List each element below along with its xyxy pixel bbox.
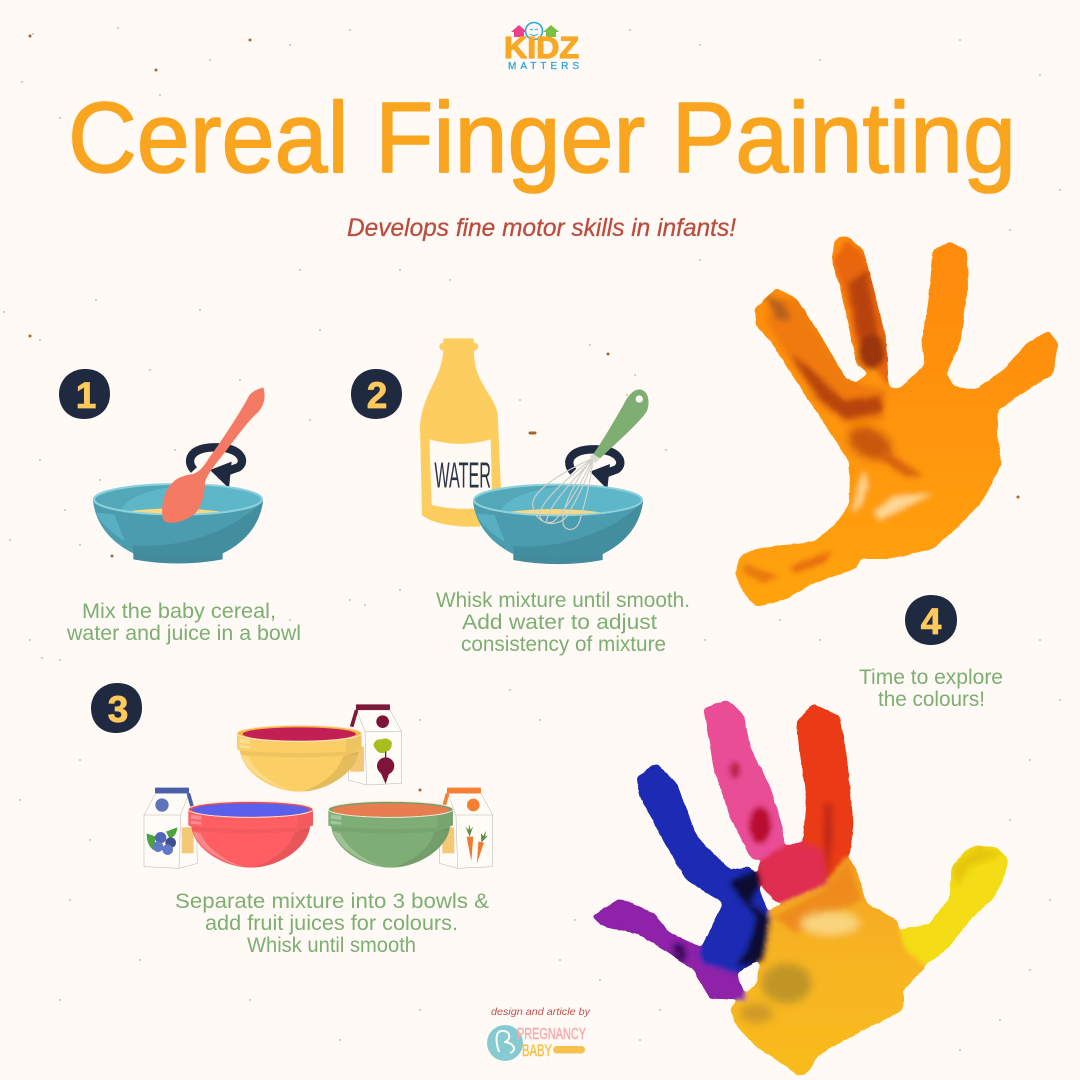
red-pink knuckle [758, 842, 827, 903]
step 1 badge: 1 [76, 375, 96, 416]
green bowl with carrot juice [328, 801, 453, 868]
wordmark BABY: BABY [522, 1041, 552, 1060]
bowl [93, 484, 263, 563]
step 1 text: water and juice in a bowl [66, 622, 301, 645]
step 4 badge [905, 595, 957, 645]
pink finger [703, 700, 783, 860]
yellow bowl with beetroot juice [237, 725, 362, 792]
step 1 text: Mix the baby cereal, [82, 600, 276, 623]
step 4 text: Time to explore [859, 666, 1003, 689]
badge pill [553, 1046, 585, 1054]
credit text: design and article by [491, 1006, 591, 1018]
palm shading [773, 860, 862, 933]
step 1 badge [59, 369, 110, 419]
step 3 badge: 3 [108, 689, 128, 730]
logo: Kidz Matters [504, 22, 579, 72]
red finger [797, 703, 853, 877]
orange handprint [735, 235, 1058, 607]
purple finger [591, 898, 747, 1000]
water bottle: WATER [434, 455, 491, 496]
step 3 text: Whisk until smooth [247, 934, 416, 957]
dark overlap [730, 870, 770, 967]
blueberry juice carton [144, 788, 197, 868]
wordmark PREGNANCY: PREGNANCY [517, 1026, 586, 1043]
step 4 badge: 4 [921, 601, 942, 642]
step 4 text: the colours! [878, 688, 985, 711]
rotation arrow [190, 447, 242, 488]
step 2 text: Add water to adjust [462, 611, 657, 634]
wordmark KIDZ: KIDZ [504, 30, 579, 65]
spoon [162, 387, 265, 523]
wordmark MATTERS: MATTERS [508, 61, 579, 72]
step 1 text [66, 600, 301, 645]
step 3 text: add fruit juices for colours. [205, 912, 458, 935]
thumb: yellow [900, 847, 1008, 967]
step 2 text: consistency of mixture [461, 633, 666, 656]
step 3 badge [91, 683, 142, 733]
step 2 badge [351, 369, 402, 419]
credit [487, 1006, 591, 1061]
step 2 text: Whisk mixture until smooth. [436, 589, 690, 612]
multicolour handprint [591, 700, 1008, 1077]
whisk [533, 389, 649, 529]
icon: green house [543, 25, 559, 37]
red bowl with blueberry juice [188, 801, 313, 868]
step 3 illustration: bowls and juice cartons [144, 704, 493, 868]
step 1 illustration: bowl and spoon [93, 387, 265, 563]
palm: amber [730, 857, 925, 1077]
rotation arrow [569, 449, 620, 489]
blue finger [637, 763, 770, 973]
carrot juice carton [439, 788, 493, 868]
icon: pink house [511, 25, 527, 37]
icon: pregnancy baby logo [487, 1025, 523, 1061]
step 2 text [436, 589, 690, 656]
icon: smiley face [526, 22, 542, 40]
step 3 text [175, 890, 489, 957]
step 3 text: Separate mixture into 3 bowls & [175, 890, 489, 913]
beetroot juice carton [348, 704, 402, 785]
water bottle [420, 338, 501, 527]
subtitle: Develops fine motor skills in infants! [347, 214, 736, 242]
bowl [473, 485, 643, 564]
step 2 badge: 2 [367, 375, 387, 416]
step 4 text [859, 666, 1003, 711]
title: Cereal Finger Painting [68, 82, 1016, 194]
step 2 illustration: bottle, bowl and whisk [420, 338, 649, 564]
